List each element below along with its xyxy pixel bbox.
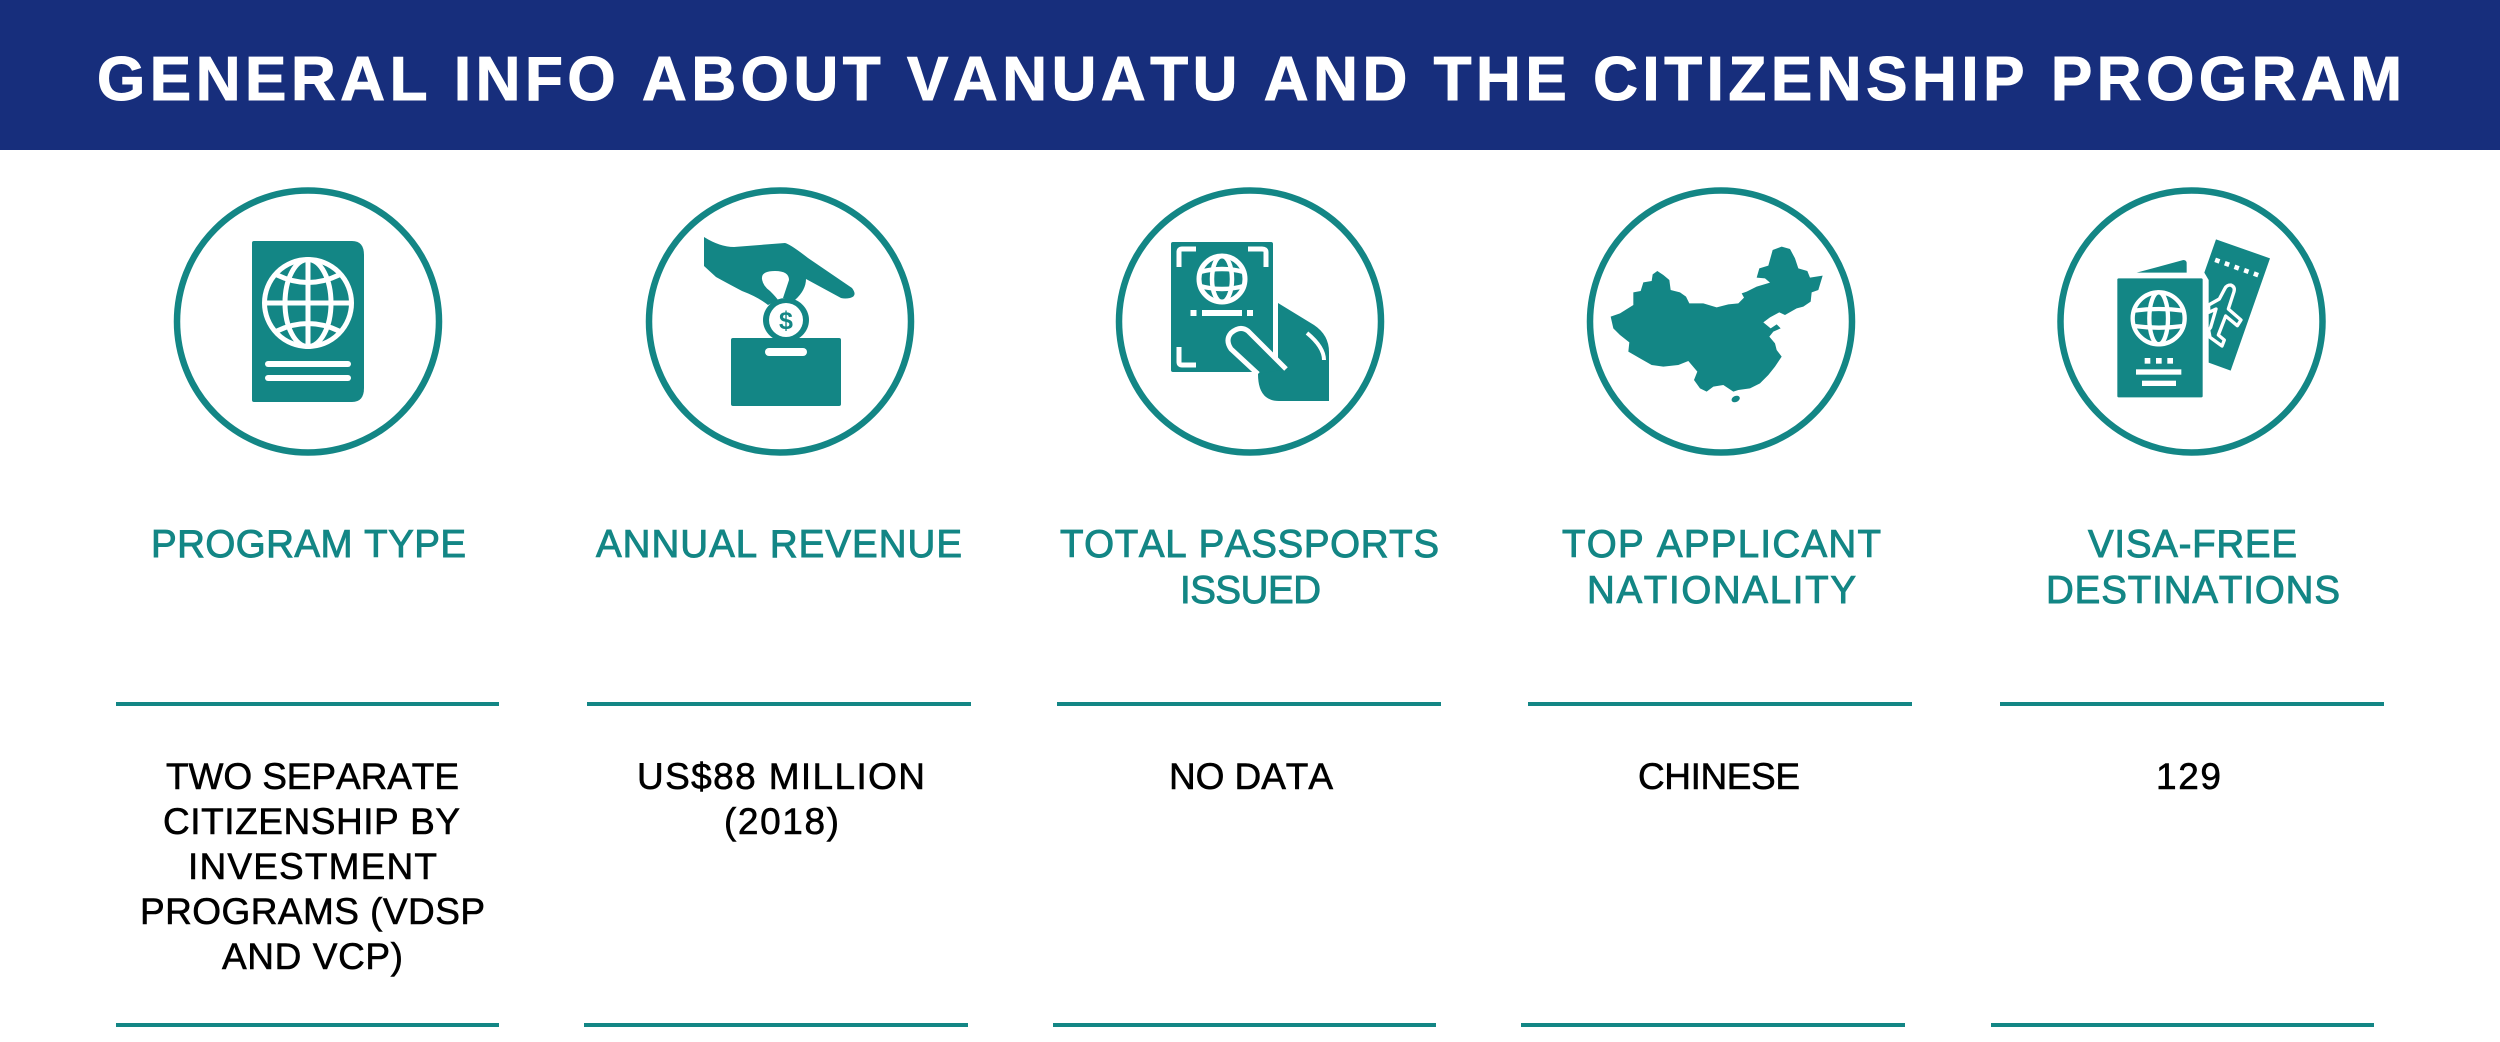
heading: top applicant nationality: NATIONALITY (1587, 569, 1856, 612)
heading: top applicant nationality (1562, 523, 1881, 612)
value: program type: TWO SEPARATE (166, 756, 459, 797)
value: annual revenue (637, 756, 925, 842)
value: program type: INVESTMENT (188, 846, 437, 887)
value: annual revenue: (2018) (724, 801, 839, 842)
icon: hand dropping coin into box (649, 190, 911, 452)
value: visa-free destinations: 129 (2156, 756, 2221, 797)
heading: annual revenue: ANNUAL REVENUE (596, 523, 962, 566)
heading: total passports issued: ISSUED (1180, 569, 1321, 612)
panel: program type (116, 190, 499, 1027)
heading: program type: PROGRAM TYPE (151, 523, 466, 566)
panel: total passports issued (1053, 190, 1441, 1027)
icon: passport in circle (177, 190, 439, 452)
heading: visa-free destinations: DESTINATIONS (2046, 569, 2340, 612)
panel: visa-free destinations (1991, 190, 2384, 1027)
value: total passports issued: NO DATA (1169, 756, 1333, 797)
value: annual revenue: US$88 MILLION (637, 756, 925, 797)
icon: hand dropping coin into box: $ (779, 307, 793, 335)
heading: total passports issued: TOTAL PASSPORTS (1060, 523, 1439, 566)
title: GENERAL INFO ABOUT VANUATU AND THE CITIZENSHIP PROGRAM (97, 45, 2402, 114)
icon: hand scanning passport (1119, 190, 1381, 452)
title band (0, 0, 2500, 150)
value: program type: CITIZENSHIP BY (163, 801, 460, 842)
heading: visa-free destinations (2046, 523, 2340, 612)
panel: annual revenue (584, 190, 971, 1027)
heading: visa-free destinations: VISA-FREE (2088, 523, 2297, 566)
panel: top applicant nationality (1521, 190, 1912, 1027)
value: program type: AND VCP) (222, 936, 403, 977)
icon: map of China (1590, 190, 1852, 452)
icon: passport and plane ticket (2060, 190, 2322, 452)
value: program type (140, 756, 485, 977)
value: top applicant nationality: CHINESE (1638, 756, 1800, 797)
heading: total passports issued (1060, 523, 1439, 612)
value: program type: PROGRAMS (VDSP (140, 891, 485, 932)
heading: top applicant nationality: TOP APPLICANT (1562, 523, 1881, 566)
